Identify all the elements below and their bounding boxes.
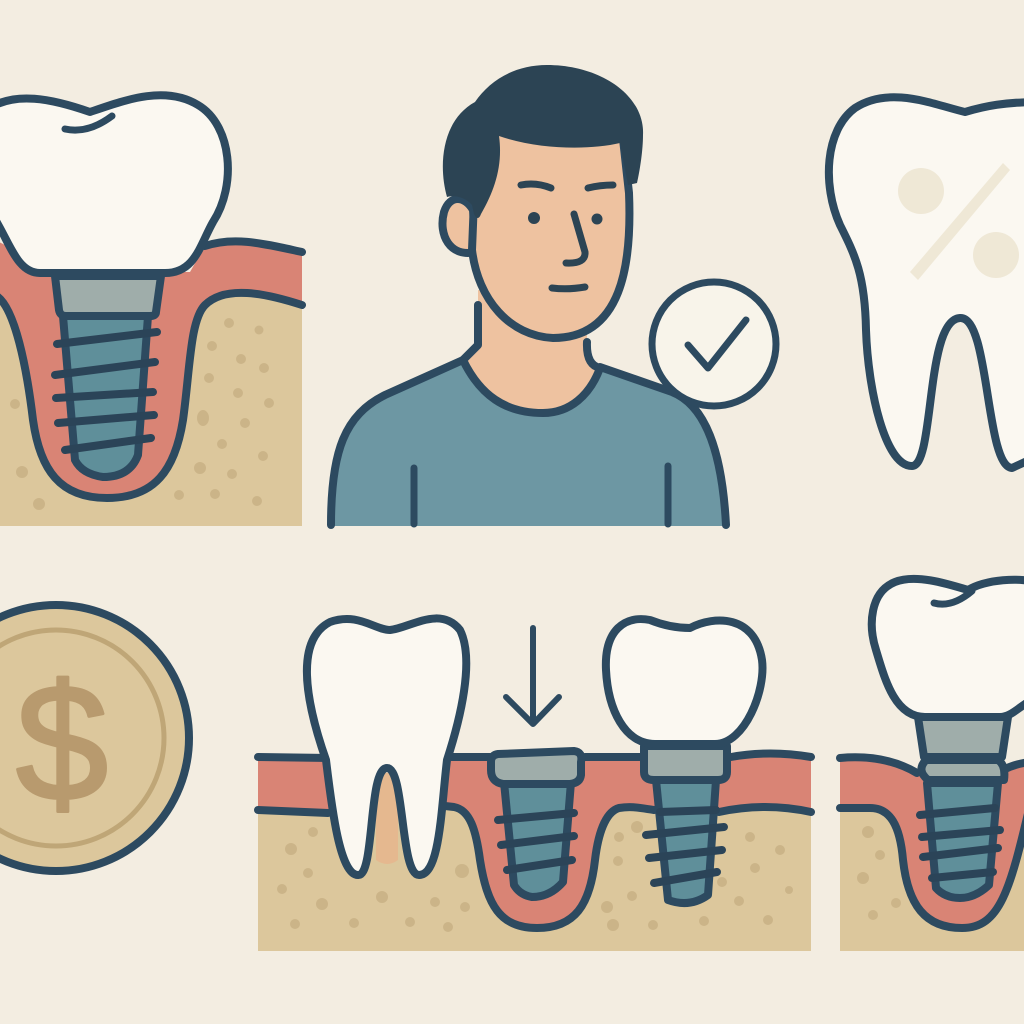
gum outline top: [205, 241, 302, 252]
bone: [258, 790, 811, 951]
crown: [0, 95, 228, 273]
bone: [840, 790, 1024, 951]
implant being placed: [491, 751, 581, 897]
check badge: [652, 282, 776, 406]
ear: [442, 199, 476, 253]
eyes: [528, 212, 540, 224]
icon: dollar coin: $: [16, 651, 108, 836]
arm lines: [414, 466, 668, 524]
panel: patient with check mark: [331, 65, 776, 526]
hair: [443, 65, 643, 218]
crown: [872, 579, 1024, 717]
shirt: [331, 358, 726, 526]
neck: [463, 290, 598, 413]
natural tooth: [307, 618, 466, 875]
shirt outline: [331, 360, 726, 525]
eyebrows: [521, 184, 613, 188]
gum: [0, 240, 302, 498]
implant screw: [55, 276, 161, 477]
neck and collar outline: [463, 305, 600, 413]
bone speckles: [277, 821, 793, 932]
percent sign: [898, 163, 1019, 280]
panel: tooth with percent: [829, 97, 1024, 468]
implant: [918, 717, 1008, 898]
bone block: [0, 290, 302, 526]
gum right of tooth: [440, 757, 811, 928]
gum outlines: [840, 757, 1024, 928]
gum: [840, 757, 1024, 928]
panel: implant procedure, bottom middle: [258, 618, 811, 951]
icon: dollar coin: [0, 605, 189, 871]
gum left of tooth: [258, 757, 330, 809]
arrow: [506, 628, 559, 724]
bone speckles: [857, 826, 901, 920]
mouth: [552, 287, 585, 289]
bone speckles: [10, 318, 274, 510]
socket outline: [445, 806, 654, 928]
implant with crown: [606, 619, 762, 903]
gum outlines: [258, 754, 811, 813]
nose: [566, 214, 585, 263]
face: [472, 130, 629, 338]
peach fill between roots: [376, 772, 398, 864]
panel: implant with crown, bottom right: [840, 579, 1024, 951]
panel: implant with crown, top left: [0, 95, 302, 526]
gum and bone outline: [0, 293, 302, 498]
